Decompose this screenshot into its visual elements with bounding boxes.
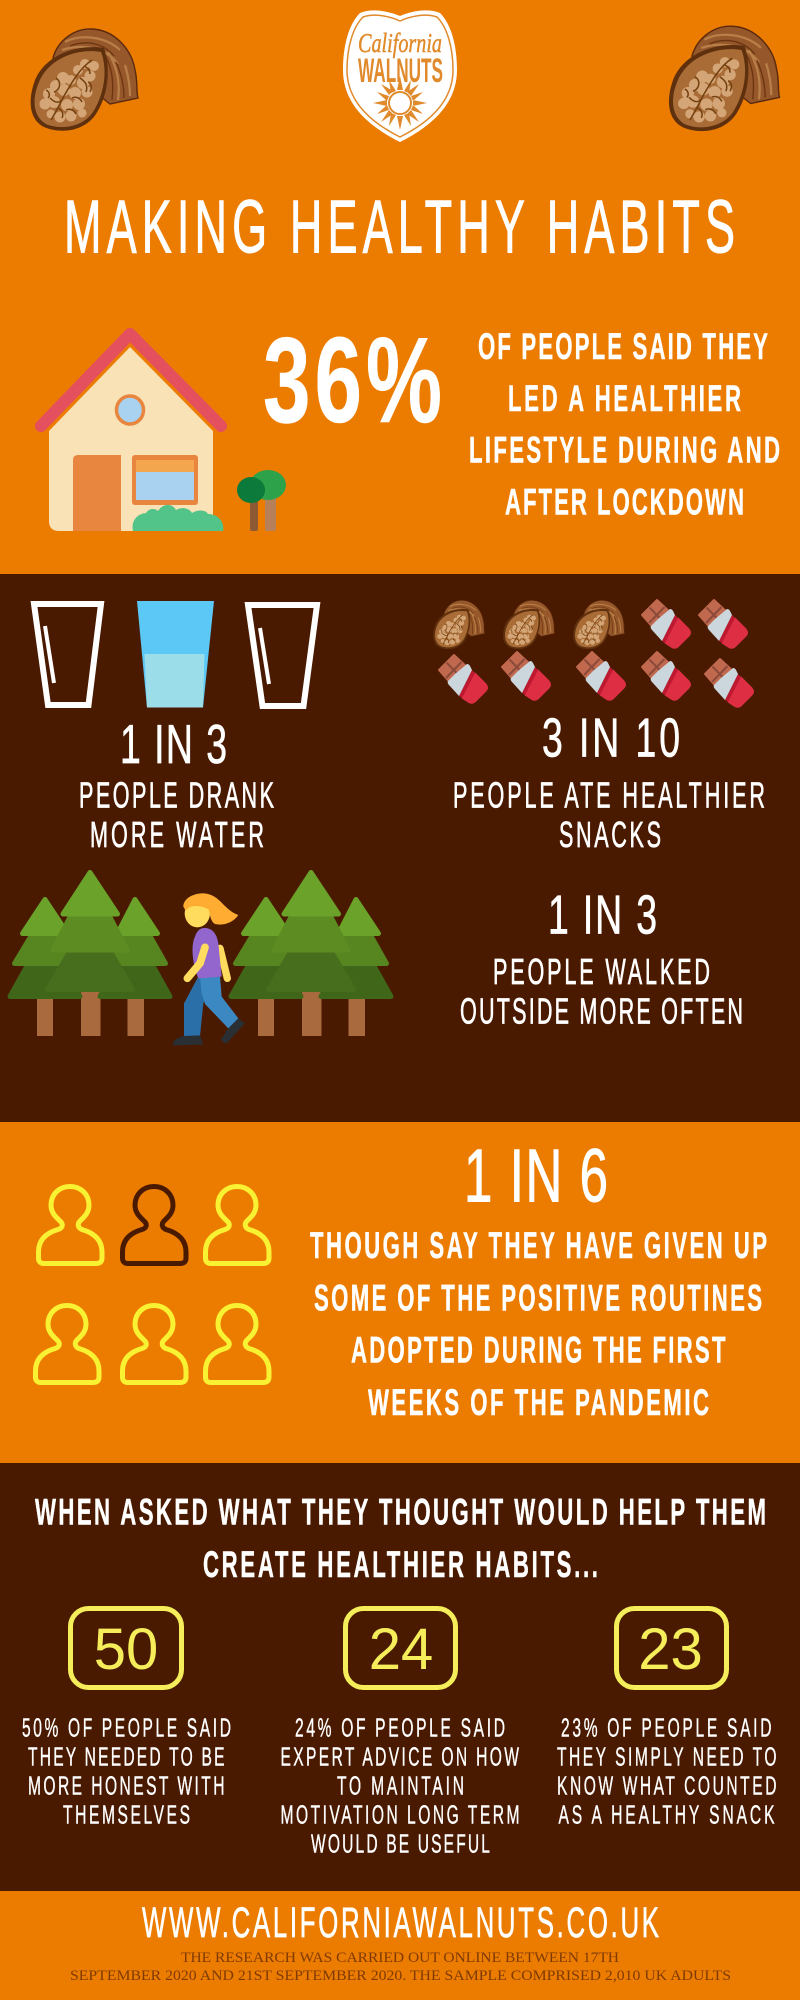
- text: healthier lifestyle statement: LED A HEALTHIER: [508, 378, 741, 419]
- stat: 1 in 6: 1 IN 6: [464, 1134, 608, 1218]
- text: 1 in 3 walked outside: PEOPLE WALKED: [493, 952, 710, 992]
- logo: California Walnuts shield: [343, 10, 457, 142]
- stat: 36%: 36%: [263, 313, 442, 449]
- text: 1 in 3 drank more water: PEOPLE DRANK: [79, 776, 274, 816]
- text: 23% healthy snack knowledge: THEY SIMPLY NEED TO: [557, 1742, 776, 1772]
- text: 1 in 3 walked outside: [460, 883, 743, 1032]
- badge: 24: [346, 1608, 456, 1688]
- badge: 24: 24: [369, 1617, 433, 1682]
- background: top orange band: [0, 0, 800, 574]
- text: 23% healthy snack knowledge: [557, 1713, 776, 1830]
- text: 24% expert advice: EXPERT ADVICE ON HOW: [280, 1742, 520, 1772]
- text: 23% healthy snack knowledge: KNOW WHAT COUNTED: [557, 1771, 776, 1801]
- footer: website: WWW.CALIFORNIAWALNUTS.CO.UK: [142, 1898, 659, 1947]
- icon: walnut right: [669, 26, 780, 131]
- text: healthier lifestyle statement: [469, 326, 780, 523]
- badge: 23: [616, 1608, 726, 1688]
- text: 24% expert advice: MOTIVATION LONG TERM: [280, 1800, 519, 1830]
- text: 23% healthy snack knowledge: 23% OF PEOPLE SAID: [561, 1713, 771, 1743]
- text: 24% expert advice: TO MAINTAIN: [337, 1771, 464, 1801]
- heading: what would help create healthier habits: WHEN ASKED WHAT THEY THOUGHT WOULD HELP THEM: [35, 1492, 766, 1533]
- background: orange 1 in 6 panel: [0, 1122, 800, 1463]
- background: dark brown habits panel: [0, 1463, 800, 1891]
- illustration: forest trees right: [231, 872, 391, 1036]
- text: 1 in 3 walked outside: OUTSIDE MORE OFTEN: [460, 992, 743, 1032]
- text: given up positive routines: WEEKS OF THE PANDEMIC: [368, 1382, 709, 1423]
- text: 24% expert advice: WOULD BE USEFUL: [311, 1829, 490, 1859]
- icon: three glasses, one filled with water: [34, 601, 317, 708]
- icon: six outlined people, one highlighted: [36, 1186, 269, 1382]
- footer: research note: [70, 1950, 731, 1984]
- footer: research note: SEPTEMBER 2020 AND 21ST SEPTEMBER 2020. THE SAMPLE COMPRISED 2,010 UK ADULTS: [70, 1968, 731, 1984]
- icon: walking woman: [173, 893, 245, 1045]
- text: 1 in 3 drank more water: 1 IN 3: [120, 713, 227, 775]
- badge: 23: 23: [638, 1617, 703, 1682]
- text: healthier lifestyle statement: OF PEOPLE SAID THEY: [478, 326, 768, 367]
- logo: California Walnuts shield: WALNUTS: [358, 52, 443, 90]
- text: 24% expert advice: 24% OF PEOPLE SAID: [295, 1713, 505, 1743]
- logo: California Walnuts shield: California: [358, 28, 442, 58]
- text: 1 in 3 walked outside: 1 IN 3: [548, 883, 657, 945]
- text: given up positive routines: ADOPTED DURING THE FIRST: [351, 1330, 726, 1371]
- text: 3 in 10 ate healthier snacks: PEOPLE ATE HEALTHIER: [453, 776, 765, 816]
- text: 3 in 10 ate healthier snacks: [453, 706, 765, 855]
- text: given up positive routines: THOUGH SAY THEY HAVE GIVEN UP: [310, 1225, 767, 1266]
- title: MAKING HEALTHY HABITS: [64, 186, 735, 269]
- text: 50% honest with themselves: THEMSELVES: [63, 1800, 190, 1830]
- badge: 50: [70, 1608, 182, 1688]
- text: 50% honest with themselves: MORE HONEST WITH: [28, 1771, 225, 1801]
- icon: walnut left: [31, 29, 138, 131]
- text: 50% honest with themselves: THEY NEEDED TO BE: [28, 1742, 224, 1772]
- text: given up positive routines: [310, 1225, 767, 1423]
- text: 24% expert advice: [280, 1713, 520, 1859]
- background: orange footer band: [0, 1891, 800, 2000]
- text: 1 in 3 drank more water: MORE WATER: [90, 815, 264, 855]
- icon: house with trees: [41, 334, 286, 531]
- footer: research note: THE RESEARCH WAS CARRIED OUT ONLINE BETWEEN 17TH: [181, 1950, 620, 1966]
- badge: 50: 50: [94, 1617, 158, 1682]
- text: 50% honest with themselves: 50% OF PEOPLE SAID: [22, 1713, 231, 1743]
- heading: what would help create healthier habits: CREATE HEALTHIER HABITS...: [203, 1544, 598, 1585]
- text: 3 in 10 ate healthier snacks: SNACKS: [559, 815, 661, 855]
- text: 3 in 10 ate healthier snacks: 3 IN 10: [542, 706, 680, 768]
- text: given up positive routines: SOME OF THE POSITIVE ROUTINES: [314, 1278, 762, 1319]
- text: healthier lifestyle statement: LIFESTYLE DURING AND: [469, 430, 780, 471]
- text: 50% honest with themselves: [22, 1713, 231, 1830]
- heading: what would help create healthier habits: [35, 1492, 766, 1585]
- text: 1 in 3 drank more water: [79, 713, 274, 855]
- illustration: forest trees left: [10, 872, 170, 1036]
- text: healthier lifestyle statement: AFTER LOCKDOWN: [505, 482, 744, 523]
- icon: three walnuts and seven chocolate bars: [433, 600, 754, 707]
- text: 23% healthy snack knowledge: AS A HEALTHY SNACK: [558, 1800, 775, 1830]
- background: dark brown stats panel: [0, 574, 800, 1122]
